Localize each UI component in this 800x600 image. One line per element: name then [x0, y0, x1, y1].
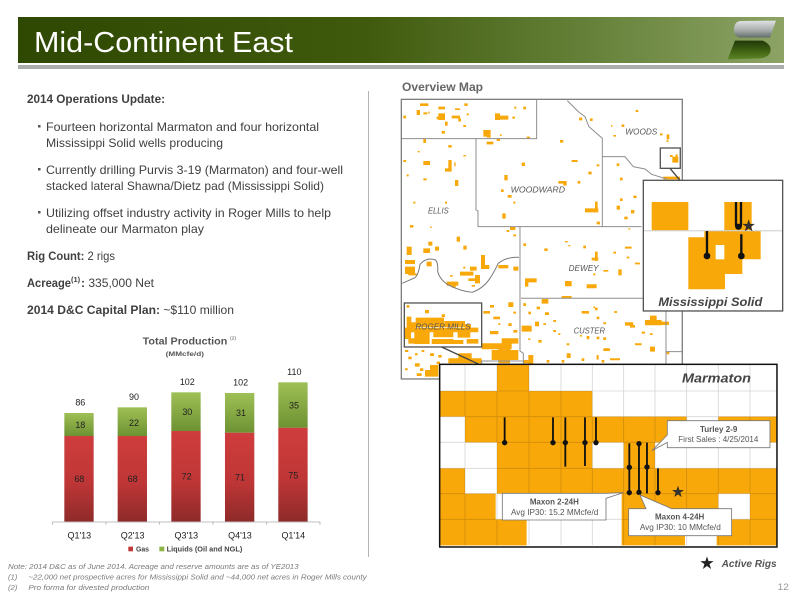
callout: Maxon 4-24H	[629, 495, 732, 536]
overview map heading: Overview Map	[402, 80, 483, 94]
data labels	[74, 367, 301, 484]
inset map: Marmaton	[440, 364, 789, 592]
chart title	[143, 335, 236, 358]
legend: Liquids (Oil and NGL)	[167, 545, 243, 554]
county lines	[401, 100, 682, 364]
callout: Maxon 2-24H	[502, 493, 623, 520]
county labels: WOODWARD	[511, 184, 565, 194]
icon: company logo	[728, 21, 776, 59]
data labels: 102	[233, 378, 248, 388]
data labels: 18	[75, 420, 85, 430]
callout: Maxon 2-24H: Maxon 2-24H	[530, 497, 579, 507]
data labels: 68	[74, 474, 84, 484]
bars	[64, 382, 308, 522]
callout: Maxon 4-24H: Avg IP30: 10 MMcfe/d	[640, 522, 721, 532]
data labels: 102	[180, 377, 195, 387]
data labels: 71	[235, 472, 245, 482]
data labels: 31	[236, 408, 246, 418]
data labels: 90	[129, 392, 139, 402]
footnotes: (2)	[8, 583, 18, 592]
county labels	[415, 126, 658, 336]
axis labels: Q3'13	[174, 530, 198, 540]
operations update text block: Utilizing offset industry activity in Roger Mills to help	[46, 206, 331, 220]
inset label: Marmaton	[682, 371, 751, 385]
data labels: 86	[75, 397, 85, 407]
callout box: Mississippi Solid location	[660, 148, 680, 180]
operations update text block: 2014 D&C Capital Plan: ~$110 million	[27, 303, 234, 317]
operations update text block	[27, 92, 343, 317]
title: Mid-Continent East	[34, 27, 293, 59]
footnotes	[8, 562, 368, 592]
icon: active rig star	[743, 220, 754, 231]
data labels: 110	[287, 367, 301, 377]
operations update text block: Fourteen horizontal Marmaton and four horizontal	[46, 120, 319, 134]
operations update text block: Acreage	[27, 276, 71, 290]
callout: Maxon 2-24H: Avg IP30: 15.2 MMcfe/d	[511, 507, 599, 517]
river	[402, 257, 519, 292]
callout: Turley 2-9: First Sales : 4/25/2014	[678, 434, 759, 444]
acreage patches	[403, 103, 680, 377]
legend	[128, 545, 243, 554]
axis labels: Q4'13	[228, 530, 252, 540]
county labels: ELLIS	[428, 205, 449, 215]
callout box: Roger Mills	[404, 303, 482, 364]
data labels: 72	[182, 472, 192, 482]
data labels: 75	[288, 470, 298, 480]
legend: Gas	[136, 545, 149, 554]
page number: 12	[778, 582, 789, 592]
header banner	[18, 17, 784, 69]
inset map: Mississippi Solid	[643, 180, 783, 311]
legend: active rigs: Active Rigs	[721, 559, 777, 570]
axis labels: Q1'13	[67, 530, 91, 540]
operations update text block: Currently drilling Purvis 3-19 (Marmaton) and four-well	[46, 163, 343, 177]
inset label: Mississippi Solid	[658, 295, 763, 309]
footnotes: (1)	[8, 573, 18, 582]
data labels: 22	[129, 418, 139, 428]
acreage grid	[440, 365, 777, 545]
chart title: (MMcfe/d)	[166, 351, 204, 358]
operations update text block: stacked lateral Shawna/Dietz pad (Mississippi Solid)	[46, 179, 324, 193]
chart title: (2)	[230, 335, 236, 341]
county labels: DEWEY	[569, 263, 600, 273]
data labels: 35	[289, 401, 299, 411]
county labels: CUSTER	[574, 326, 605, 336]
icon: active rig star	[673, 486, 683, 497]
map border	[401, 99, 682, 379]
operations update text block: : 335,000 Net	[81, 276, 155, 290]
stacked bar chart: total production	[52, 335, 320, 554]
overview map	[401, 99, 682, 379]
operations update text block: (1)	[71, 275, 81, 284]
operations update text block: Mississippi Solid wells producing	[46, 136, 223, 150]
footnotes: ~22,000 net prospective acres for Mississippi Solid and ~44,000 net acres in Roger Mills county	[28, 573, 368, 582]
axis labels: Q1'14	[281, 530, 305, 540]
callout: Turley 2-9: Turley 2-9	[700, 424, 738, 434]
operations update text block: Rig Count: 2 rigs	[27, 249, 115, 263]
axis	[52, 522, 320, 525]
footnotes: Pro forma for divested production	[28, 583, 149, 592]
legend: active rigs	[700, 556, 777, 570]
wells	[505, 417, 658, 493]
callout: Maxon 4-24H: Maxon 4-24H	[655, 512, 704, 522]
county labels: WOODS	[625, 126, 658, 136]
axis labels	[67, 530, 305, 540]
acreage blocks	[652, 202, 761, 289]
county labels: ROGER MILLS	[415, 321, 471, 331]
operations update text block: delineate our Marmaton play	[46, 222, 204, 236]
data labels: 68	[128, 474, 138, 484]
wells	[707, 202, 741, 256]
data labels: 30	[182, 407, 192, 417]
axis labels: Q2'13	[121, 530, 145, 540]
vertical divider	[368, 91, 369, 557]
chart title: Total Production	[143, 336, 227, 347]
footnotes: Note: 2014 D&C as of June 2014. Acreage and reserve amounts are as of YE2013	[8, 562, 299, 571]
callout: Turley 2-9	[652, 421, 770, 451]
operations update text block: 2014 Operations Update:	[27, 92, 165, 106]
